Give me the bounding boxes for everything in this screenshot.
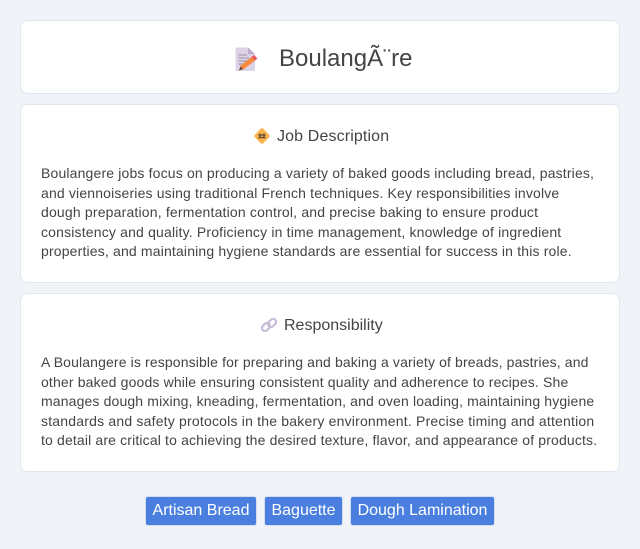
panel: title card [20, 20, 620, 94]
text block: job description: dough preparation, fermentation control, and precise baking to ensure product [41, 204, 538, 220]
title: BoulangÃ¨re [279, 45, 412, 72]
text block: responsibility [41, 354, 597, 448]
panel: job description [20, 104, 620, 283]
text block: responsibility: to detail are critical to achieving the desired texture, flavor, and appearance of products. [41, 432, 597, 448]
text block: job description: consistency and quality. Proficiency in time management, knowledge of ingredient [41, 224, 561, 240]
tag: Artisan Bread: Artisan Bread [153, 502, 249, 519]
tag: Baguette [264, 496, 343, 526]
tag: Baguette: Baguette [271, 502, 336, 519]
heading: job description: Job Description [277, 128, 389, 145]
text block: responsibility: other baked goods while ensuring consistent quality and adherence to recipes. She [41, 374, 568, 390]
text block: job description: and viennoiseries using traditional French techniques. Key responsibilities involve [41, 185, 559, 201]
heading: responsibility: Responsibility [284, 317, 383, 334]
panel: responsibility [20, 293, 620, 472]
tag: Dough Lamination: Dough Lamination [358, 502, 487, 519]
icon: construction diamond [254, 128, 270, 144]
icon: chain link [260, 318, 278, 332]
text block: responsibility: manages dough mixing, kneading, fermentation, and oven loading, maintaining hygiene [41, 393, 594, 409]
text block: job description [41, 165, 594, 259]
text block: job description: Boulangere jobs focus on producing a variety of baked goods including bread, pastries, [41, 165, 594, 181]
tag: Dough Lamination [350, 496, 495, 526]
tag: Artisan Bread [145, 496, 257, 526]
icon: document with pencil [236, 48, 258, 71]
text block: job description: properties, and maintaining hygiene standards are essential for success in this role. [41, 243, 572, 259]
text block: responsibility: A Boulangere is responsible for preparing and baking a variety of breads, pastries, and [41, 354, 589, 370]
text block: responsibility: standards and safety protocols in the bakery environment. Precise timing and attention [41, 413, 594, 429]
